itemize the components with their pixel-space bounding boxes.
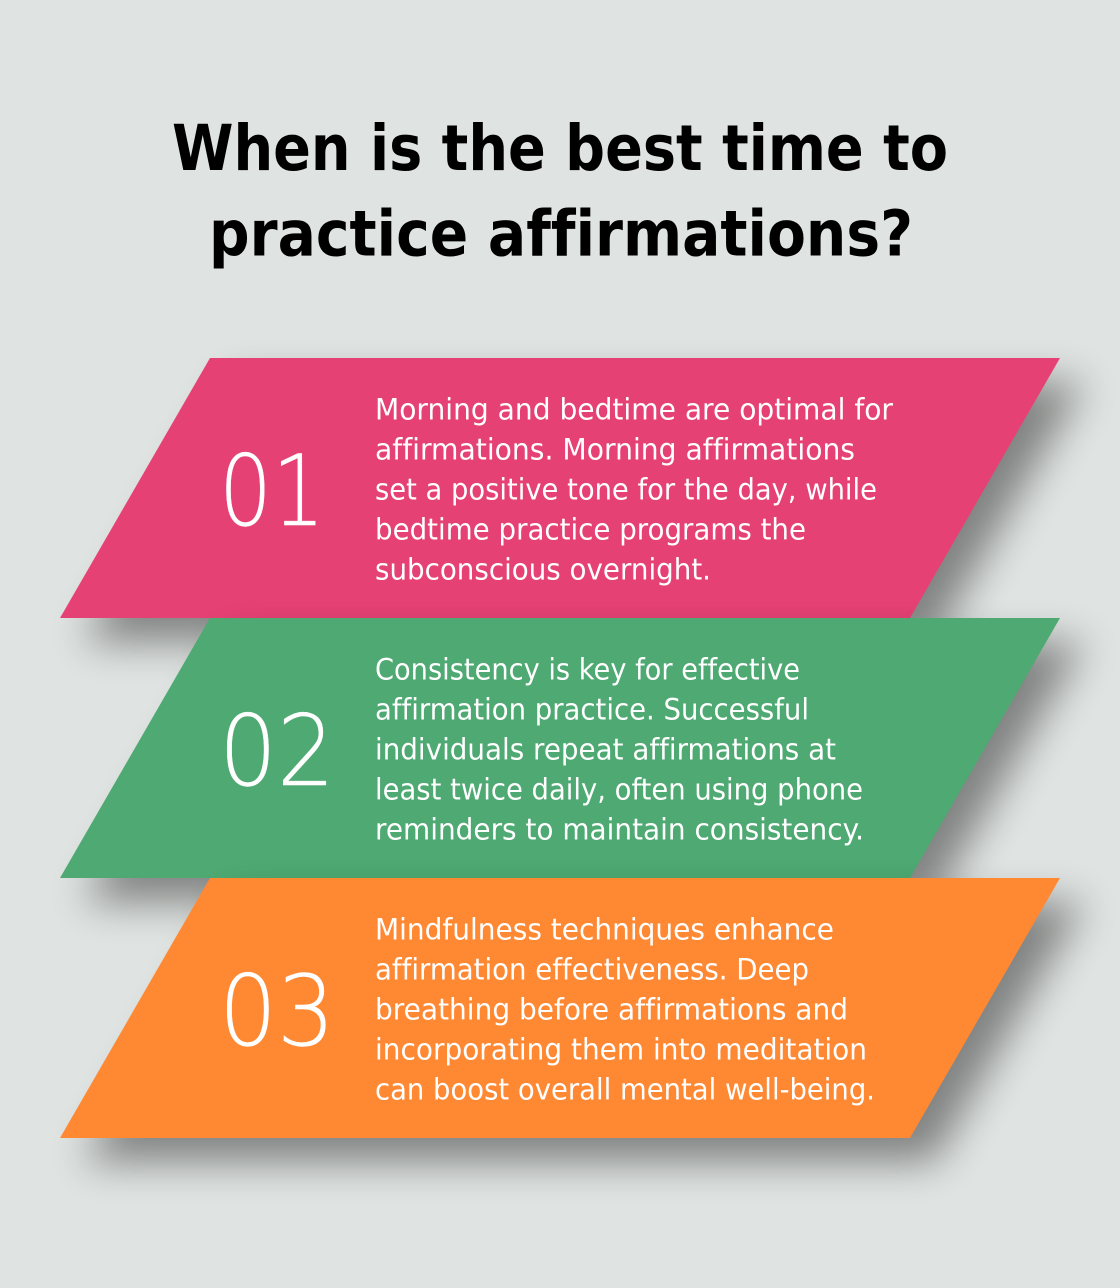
text: step 01 description: set a positive tone for the day, while (375, 472, 877, 506)
number 03: 03 (219, 955, 335, 1069)
text: step 02 description: individuals repeat affirmations at (375, 732, 836, 766)
text: step 03 description: Mindfulness techniques enhance (375, 912, 834, 946)
panel: step 02 (60, 618, 1084, 902)
text: step 03 description (375, 912, 875, 1106)
number 01: 01 (219, 435, 325, 549)
text: step 01 description: affirmations. Morning affirmations (375, 432, 855, 466)
panel: step 01 (60, 358, 1084, 642)
title: When is the best time to (172, 112, 948, 185)
text: step 01 description: Morning and bedtime are optimal for (375, 392, 894, 426)
text: step 02 description (375, 652, 864, 846)
number 02: 02 (219, 695, 335, 809)
text: step 01 description: bedtime practice programs the (375, 512, 806, 546)
text: step 03 description: breathing before affirmations and (375, 992, 848, 1026)
title (172, 112, 948, 270)
text: step 02 description: affirmation practice. Successful (375, 692, 809, 726)
title: practice affirmations? (209, 198, 913, 270)
text: step 02 description: least twice daily, often using phone (375, 772, 863, 806)
text: step 03 description: incorporating them into meditation (375, 1032, 867, 1066)
text: step 01 description (375, 392, 894, 586)
text: step 03 description: can boost overall mental well-being. (375, 1072, 875, 1106)
text: step 03 description: affirmation effectiveness. Deep (375, 952, 809, 986)
panel: step 03 (60, 878, 1084, 1162)
text: step 02 description: Consistency is key for effective (375, 652, 800, 686)
text: step 02 description: reminders to maintain consistency. (375, 812, 864, 846)
text: step 01 description: subconscious overnight. (375, 552, 711, 586)
